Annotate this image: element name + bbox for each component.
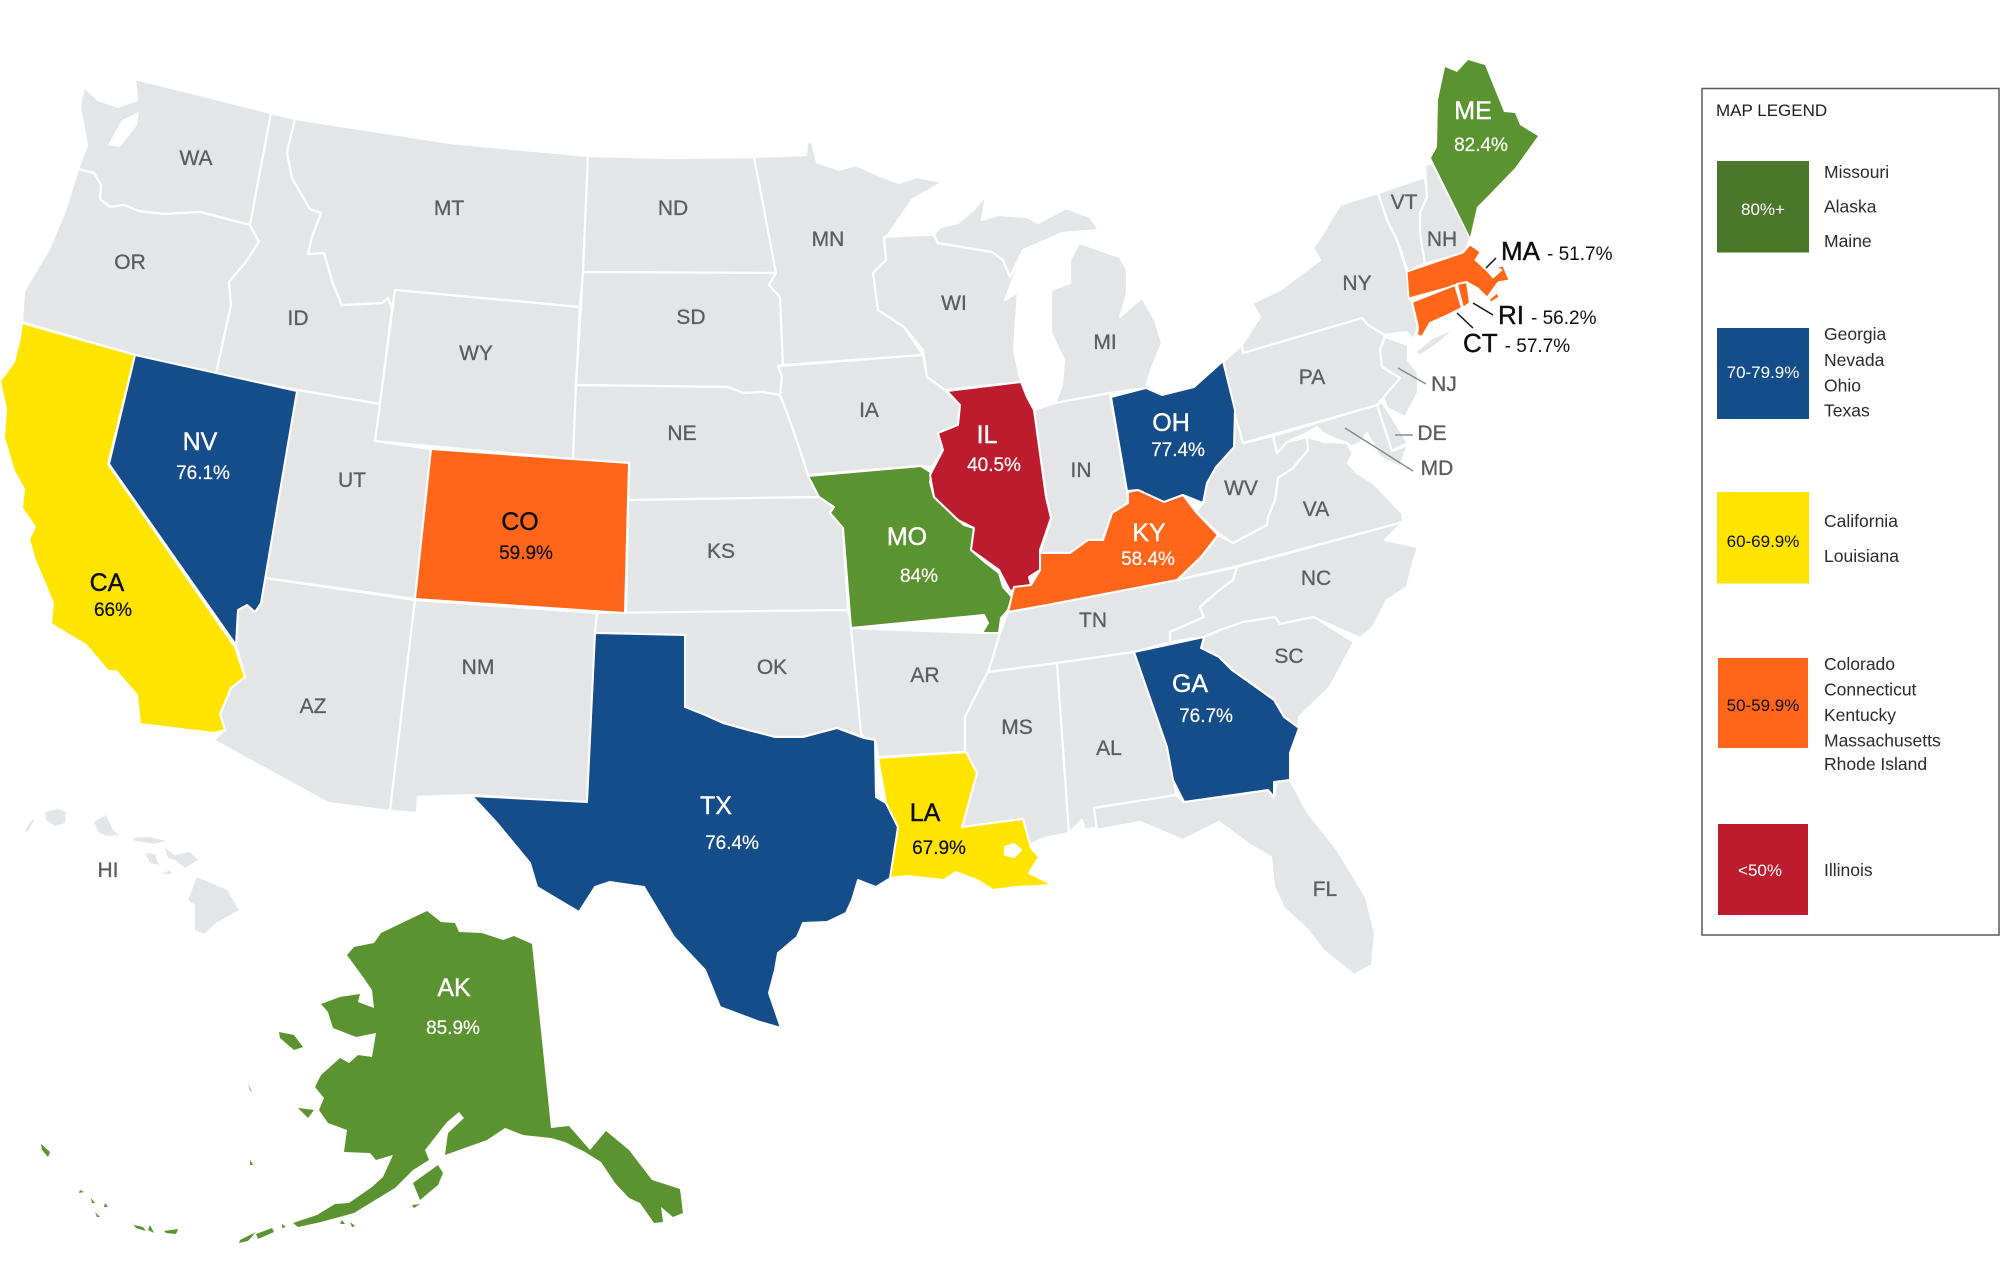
label: WY: WY: [459, 342, 493, 365]
label: Missouri: 84%: [900, 566, 938, 587]
state: North Dakota: [583, 156, 776, 273]
label: OK: OK: [757, 656, 787, 679]
label: Colorado: CO: [501, 508, 539, 536]
state: Oklahoma: [595, 610, 864, 738]
label: DE: DE: [1417, 422, 1447, 445]
label: Ohio: 77.4%: [1151, 440, 1205, 461]
legend swatch: 80%+: 80%+: [1741, 200, 1785, 219]
label: Texas: TX: [700, 792, 732, 820]
label: Alaska: [426, 974, 480, 1039]
state: Michigan lower peninsula: [1051, 243, 1162, 403]
state: Montana: [287, 119, 588, 308]
state: Pennsylvania: [1223, 318, 1400, 443]
state: Michigan upper peninsula: [934, 195, 1099, 277]
label: MD: MD: [1421, 457, 1453, 480]
labels: coloured state codes and values: [90, 97, 1613, 1039]
legend swatch: 60-69.9%: [1717, 492, 1809, 584]
label: Maine: ME: [1454, 97, 1492, 125]
legend states: 60-69.9%: California: [1824, 511, 1898, 531]
label: Massachusetts: MA - 51.7%: [1501, 236, 1613, 266]
legend swatch: 50-59.9%: 50-59.9%: [1727, 696, 1799, 715]
label: WV: WV: [1224, 477, 1258, 500]
legend states: 80%+: Maine: [1824, 231, 1872, 251]
label: NC: NC: [1301, 567, 1331, 590]
state: Louisiana: [878, 752, 1053, 890]
label: NY: NY: [1342, 272, 1372, 295]
legend states: 60-69.9%: Louisiana: [1824, 546, 1899, 566]
labels: uncoloured state abbreviations: [98, 147, 1457, 901]
state: Massachusetts: [1407, 245, 1509, 302]
state: Arkansas: [851, 628, 1000, 757]
label: Alaska: AK: [437, 974, 471, 1002]
state: Kansas: [626, 497, 848, 613]
legend swatch: 70-79.9%: [1717, 328, 1809, 419]
label: Illinois: IL: [977, 421, 998, 449]
state: California: [0, 323, 245, 733]
label: Nevada: 76.1%: [176, 463, 230, 484]
legend swatch: below 50%: [1718, 824, 1808, 915]
label: AR: AR: [910, 664, 940, 687]
state: New Mexico: [390, 600, 597, 813]
label: NH: NH: [1427, 228, 1457, 251]
label: Kentucky: 58.4%: [1121, 549, 1175, 570]
label: WA: WA: [179, 147, 213, 170]
label: Colorado: 59.9%: [499, 543, 553, 564]
legend states: 80%+: [1824, 162, 1889, 251]
label: IA: IA: [859, 399, 879, 422]
label: Louisiana: 67.9%: [912, 838, 966, 859]
state: New Hampshire: [1420, 163, 1470, 264]
label: Connecticut: CT - 57.7%: [1463, 328, 1570, 358]
map detail: Puget Sound water: [108, 112, 139, 147]
legend states: 80%+: Alaska: [1824, 196, 1877, 216]
legend states: 50-59.9%: [1824, 654, 1941, 774]
legend states: 50-59.9%: Massachusetts: [1824, 730, 1941, 750]
label: AL: AL: [1096, 737, 1122, 760]
state: Colorado: [415, 449, 629, 613]
state: New York: [1242, 193, 1418, 353]
map: coloured states: [0, 60, 1538, 1243]
state: South Carolina: [1201, 615, 1354, 728]
label: FL: FL: [1313, 878, 1337, 901]
state: Mississippi: [962, 663, 1069, 845]
legend states: 50-59.9%: Kentucky: [1824, 705, 1896, 725]
state: Tennessee: [988, 567, 1237, 672]
label: Missouri: MO: [887, 523, 927, 551]
state: Nebraska: [573, 385, 819, 500]
label: Nevada: NV: [183, 428, 218, 456]
label: WI: WI: [941, 292, 967, 315]
state: South Dakota: [576, 272, 783, 395]
label: VT: VT: [1391, 191, 1418, 214]
state: West Virginia: [1196, 408, 1308, 543]
label: Maine: [1454, 97, 1508, 156]
legend states: 70-79.9%: Georgia: [1824, 324, 1887, 344]
label: MT: MT: [434, 197, 464, 220]
state: Indiana: [1034, 393, 1128, 553]
legend states: 50-59.9%: Connecticut: [1824, 680, 1917, 700]
state: Texas: [472, 633, 898, 1028]
state: Missouri: [808, 466, 1012, 633]
state: Georgia: [1134, 637, 1299, 802]
legend states: 60-69.9%: [1824, 511, 1899, 566]
label: Rhode Island: RI - 56.2%: [1498, 300, 1597, 330]
state: New Jersey: [1380, 337, 1418, 417]
label: TN: TN: [1079, 609, 1107, 632]
state: Kentucky: [1008, 490, 1218, 612]
label: OR: OR: [114, 251, 146, 274]
label: California: CA: [90, 569, 125, 597]
state: Maine: [1431, 60, 1538, 237]
legend frame: [1702, 88, 1999, 935]
label: Kentucky: [1121, 519, 1175, 570]
label: ID: ID: [288, 307, 308, 330]
label: MN: MN: [812, 228, 844, 251]
state: Connecticut: [1412, 285, 1462, 337]
label: Ohio: OH: [1152, 409, 1190, 437]
legend states: 70-79.9%: Nevada: [1824, 350, 1885, 370]
legend swatch: 80%+: [1717, 161, 1809, 252]
state: Idaho: [216, 113, 392, 404]
label: Georgia: [1172, 670, 1233, 727]
legend states: 50-59.9%: Colorado: [1824, 654, 1895, 674]
label: Georgia: GA: [1172, 670, 1208, 698]
state: North Carolina: [1170, 522, 1418, 642]
legend states: 70-79.9%: Texas: [1824, 400, 1870, 420]
legend states: 50-59.9%: Rhode Island: [1824, 754, 1927, 774]
state: Hawaii islands: [24, 809, 239, 934]
state: Utah: [265, 390, 431, 599]
label: Texas: 76.4%: [705, 833, 759, 854]
legend swatch: below 50%: <50%: [1738, 861, 1782, 880]
label: SD: SD: [676, 306, 706, 329]
state: Alaska islands: [41, 1032, 443, 1243]
state: Wyoming: [375, 290, 580, 459]
state: Iowa: [778, 355, 960, 475]
state: Arizona: [213, 578, 415, 811]
label: MI: MI: [1093, 331, 1117, 354]
legend swatch: 50-59.9%: [1718, 658, 1808, 748]
label: AZ: AZ: [300, 695, 327, 718]
state: Florida: [1094, 780, 1375, 975]
label: California: 66%: [94, 600, 132, 621]
label: Kentucky: KY: [1132, 519, 1166, 547]
legend swatch: 70-79.9%: 70-79.9%: [1727, 363, 1799, 382]
label: Missouri: [887, 523, 938, 587]
legend swatch: 60-69.9%: 60-69.9%: [1727, 532, 1799, 551]
state: Rhode Island: [1457, 282, 1470, 308]
state: Delaware: [1377, 402, 1408, 451]
state: Alabama: [1057, 652, 1176, 833]
label: Ohio: [1151, 409, 1205, 461]
state: Maryland: [1273, 405, 1408, 467]
label: Georgia: 76.7%: [1179, 706, 1233, 727]
label: SC: SC: [1274, 645, 1304, 668]
label: VA: VA: [1303, 498, 1329, 521]
state: New York, Long Island: [1415, 327, 1457, 356]
label: Texas: [700, 792, 759, 854]
panel: map legend: [1702, 88, 1999, 935]
label: IN: IN: [1070, 459, 1092, 482]
legend states: 70-79.9%: [1824, 324, 1887, 420]
state: Wisconsin: [873, 235, 1023, 390]
map: uncoloured states: [22, 79, 1470, 975]
label: NJ: NJ: [1431, 373, 1457, 396]
legend heading: MAP LEGEND: [1716, 101, 1827, 120]
callout: leader lines for north-east states: [1345, 258, 1496, 471]
label: NM: NM: [462, 656, 494, 679]
label: ND: ND: [658, 197, 688, 220]
state: Minnesota: [754, 142, 943, 365]
label: Louisiana: LA: [910, 799, 941, 827]
label: UT: UT: [338, 469, 366, 492]
label: Alaska: 85.9%: [426, 1018, 480, 1039]
legend states: below 50%: Illinois: [1824, 860, 1873, 880]
label: PA: PA: [1299, 366, 1325, 389]
label: Louisiana: [910, 799, 966, 859]
state: Ohio: [1111, 361, 1235, 503]
state: Illinois: [930, 382, 1051, 591]
label: Illinois: 40.5%: [967, 455, 1021, 476]
state: Alaska: [293, 911, 683, 1227]
label: KS: KS: [707, 540, 735, 563]
label: HI: HI: [98, 859, 118, 882]
label: MS: MS: [1001, 716, 1033, 739]
legend states: 70-79.9%: Ohio: [1824, 376, 1861, 396]
state: Virginia: [1177, 437, 1403, 580]
label: Nevada: [176, 428, 230, 484]
label: Illinois: [967, 421, 1021, 476]
label: NE: NE: [667, 422, 697, 445]
legend states: 80%+: Missouri: [1824, 162, 1889, 182]
state: Washington: [78, 79, 271, 225]
label: California: [90, 569, 132, 621]
label: Colorado: [499, 508, 553, 564]
state: Vermont: [1378, 177, 1427, 272]
state: Oregon: [22, 169, 259, 374]
label: Maine: 82.4%: [1454, 135, 1508, 156]
state: Nevada: [109, 355, 297, 645]
